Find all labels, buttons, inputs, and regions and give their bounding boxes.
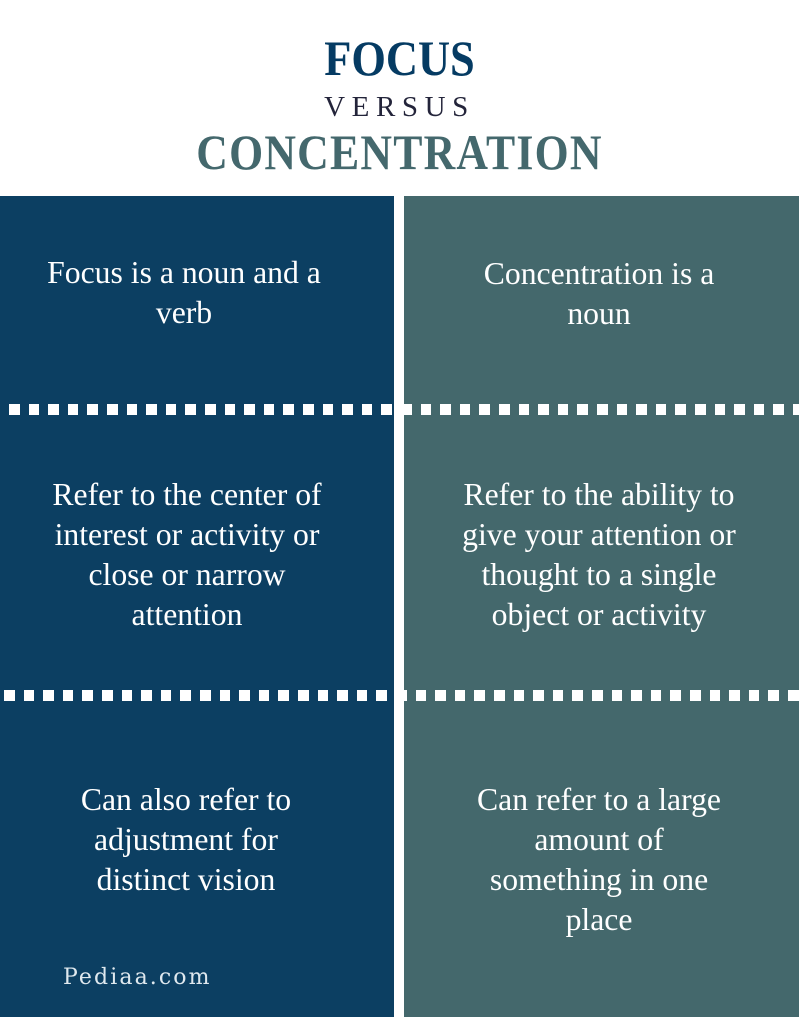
panel: focus column	[0, 196, 394, 1017]
text: focus part of speech: Focus is a noun and a	[47, 255, 321, 290]
text: concentration definition	[462, 477, 736, 632]
text: concentration definition: thought to a single	[482, 557, 716, 592]
text: concentration definition: Refer to the ability to	[463, 477, 735, 512]
title: Focus: FOCUS	[324, 30, 475, 86]
text: concentration other meaning: place	[566, 902, 632, 937]
text: focus other meaning: Can also refer to	[81, 782, 291, 817]
title: Concentration: CONCENTRATION	[196, 124, 603, 180]
divider: first row	[9, 404, 799, 415]
text: focus definition	[52, 477, 322, 632]
text: concentration definition: object or activity	[492, 597, 706, 632]
text: concentration other meaning: something in one	[490, 862, 708, 897]
subtitle: versus: VERSUS	[324, 91, 475, 123]
text: focus part of speech	[47, 255, 321, 330]
text: focus other meaning: adjustment for	[94, 822, 278, 857]
text: focus other meaning	[81, 782, 291, 897]
text: focus definition: attention	[132, 597, 242, 632]
text: focus part of speech: verb	[156, 295, 212, 330]
text: focus definition: Refer to the center of	[52, 477, 322, 512]
text: focus other meaning: distinct vision	[97, 862, 275, 897]
text: concentration other meaning: amount of	[534, 822, 664, 857]
text: focus definition: close or narrow	[88, 557, 286, 592]
text: concentration other meaning	[477, 782, 721, 937]
panel: concentration column	[404, 196, 799, 1017]
text: concentration other meaning: Can refer to a large	[477, 782, 721, 817]
text: concentration part of speech: noun	[567, 296, 631, 331]
text: concentration part of speech: Concentration is a	[484, 256, 714, 291]
text: concentration part of speech	[484, 256, 714, 331]
logo: Pediaa.com: Pediaa.com	[63, 965, 212, 990]
text: concentration definition: give your attention or	[462, 517, 736, 552]
divider: second row	[4, 690, 799, 701]
text: focus definition: interest or activity or	[55, 517, 319, 552]
